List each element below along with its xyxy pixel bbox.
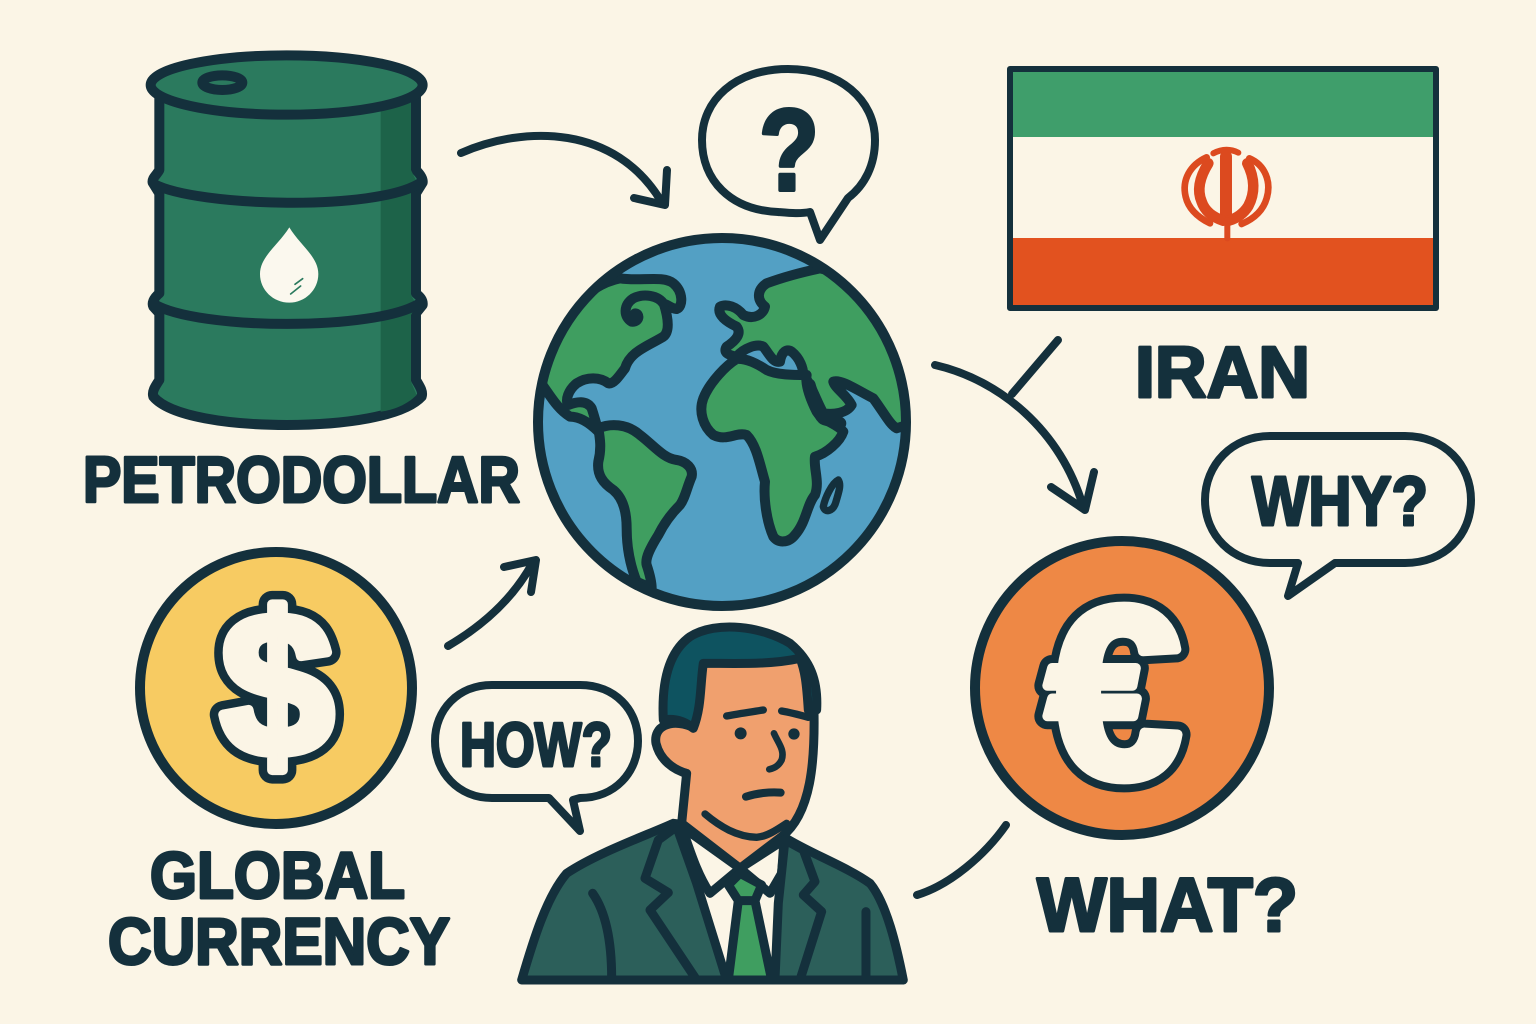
arrow: person to euro	[917, 825, 1006, 895]
south america	[598, 425, 692, 588]
jawline	[705, 814, 787, 837]
icon: globe	[538, 238, 917, 606]
eyebrows	[727, 710, 808, 717]
eyes	[736, 728, 746, 738]
label: iran: IRAN	[1135, 333, 1310, 413]
right collar	[740, 840, 784, 893]
north america	[540, 278, 681, 432]
icon: iran flag	[1010, 69, 1436, 308]
speech bubble: why	[1205, 436, 1471, 596]
label: what: WHAT?	[1037, 863, 1298, 948]
speech bubble: how: HOW?	[460, 711, 612, 780]
nose	[769, 733, 783, 769]
speech bubble: why: WHY?	[1252, 462, 1428, 540]
icon: dollar coin: $	[221, 572, 333, 799]
label: petrodollar: PETRODOLLAR	[83, 443, 520, 516]
hudson bay swirl	[626, 296, 664, 322]
label: global currency: CURRENCY	[108, 904, 450, 978]
speech bubble: how	[435, 685, 638, 831]
face and neck	[680, 660, 815, 868]
speech bubble: question mark	[702, 69, 875, 240]
eurasia	[719, 268, 917, 428]
arrow: coin to globe	[448, 560, 536, 646]
icon: oil drop	[260, 227, 318, 303]
icon: dollar coin	[140, 552, 412, 824]
icon: oil barrel	[151, 55, 423, 425]
arrow: barrel to globe	[461, 136, 667, 205]
right lapel	[775, 840, 822, 980]
icon: flag emblem	[1185, 150, 1268, 238]
mouth	[746, 792, 781, 797]
suit jacket	[522, 823, 903, 980]
shirt	[680, 827, 785, 980]
tie	[728, 873, 772, 980]
africa	[701, 359, 843, 541]
speech bubble: question mark: ?	[759, 85, 819, 215]
madagascar	[823, 480, 840, 511]
label: global currency: GLOBAL	[150, 838, 405, 912]
icon: man in suit	[522, 627, 903, 980]
left lapel	[645, 827, 727, 980]
ear	[656, 723, 710, 774]
sleeve creases	[593, 893, 866, 978]
icon: euro coin: €	[1046, 556, 1182, 829]
icon: euro coin	[975, 541, 1269, 835]
hair	[663, 627, 817, 728]
red sea	[809, 385, 840, 423]
label: global currency	[108, 838, 450, 978]
left collar	[682, 827, 740, 893]
icon: euro coin: €	[1046, 556, 1182, 829]
icon: dollar coin: $	[221, 572, 333, 799]
arrow: globe to euro	[935, 340, 1094, 510]
